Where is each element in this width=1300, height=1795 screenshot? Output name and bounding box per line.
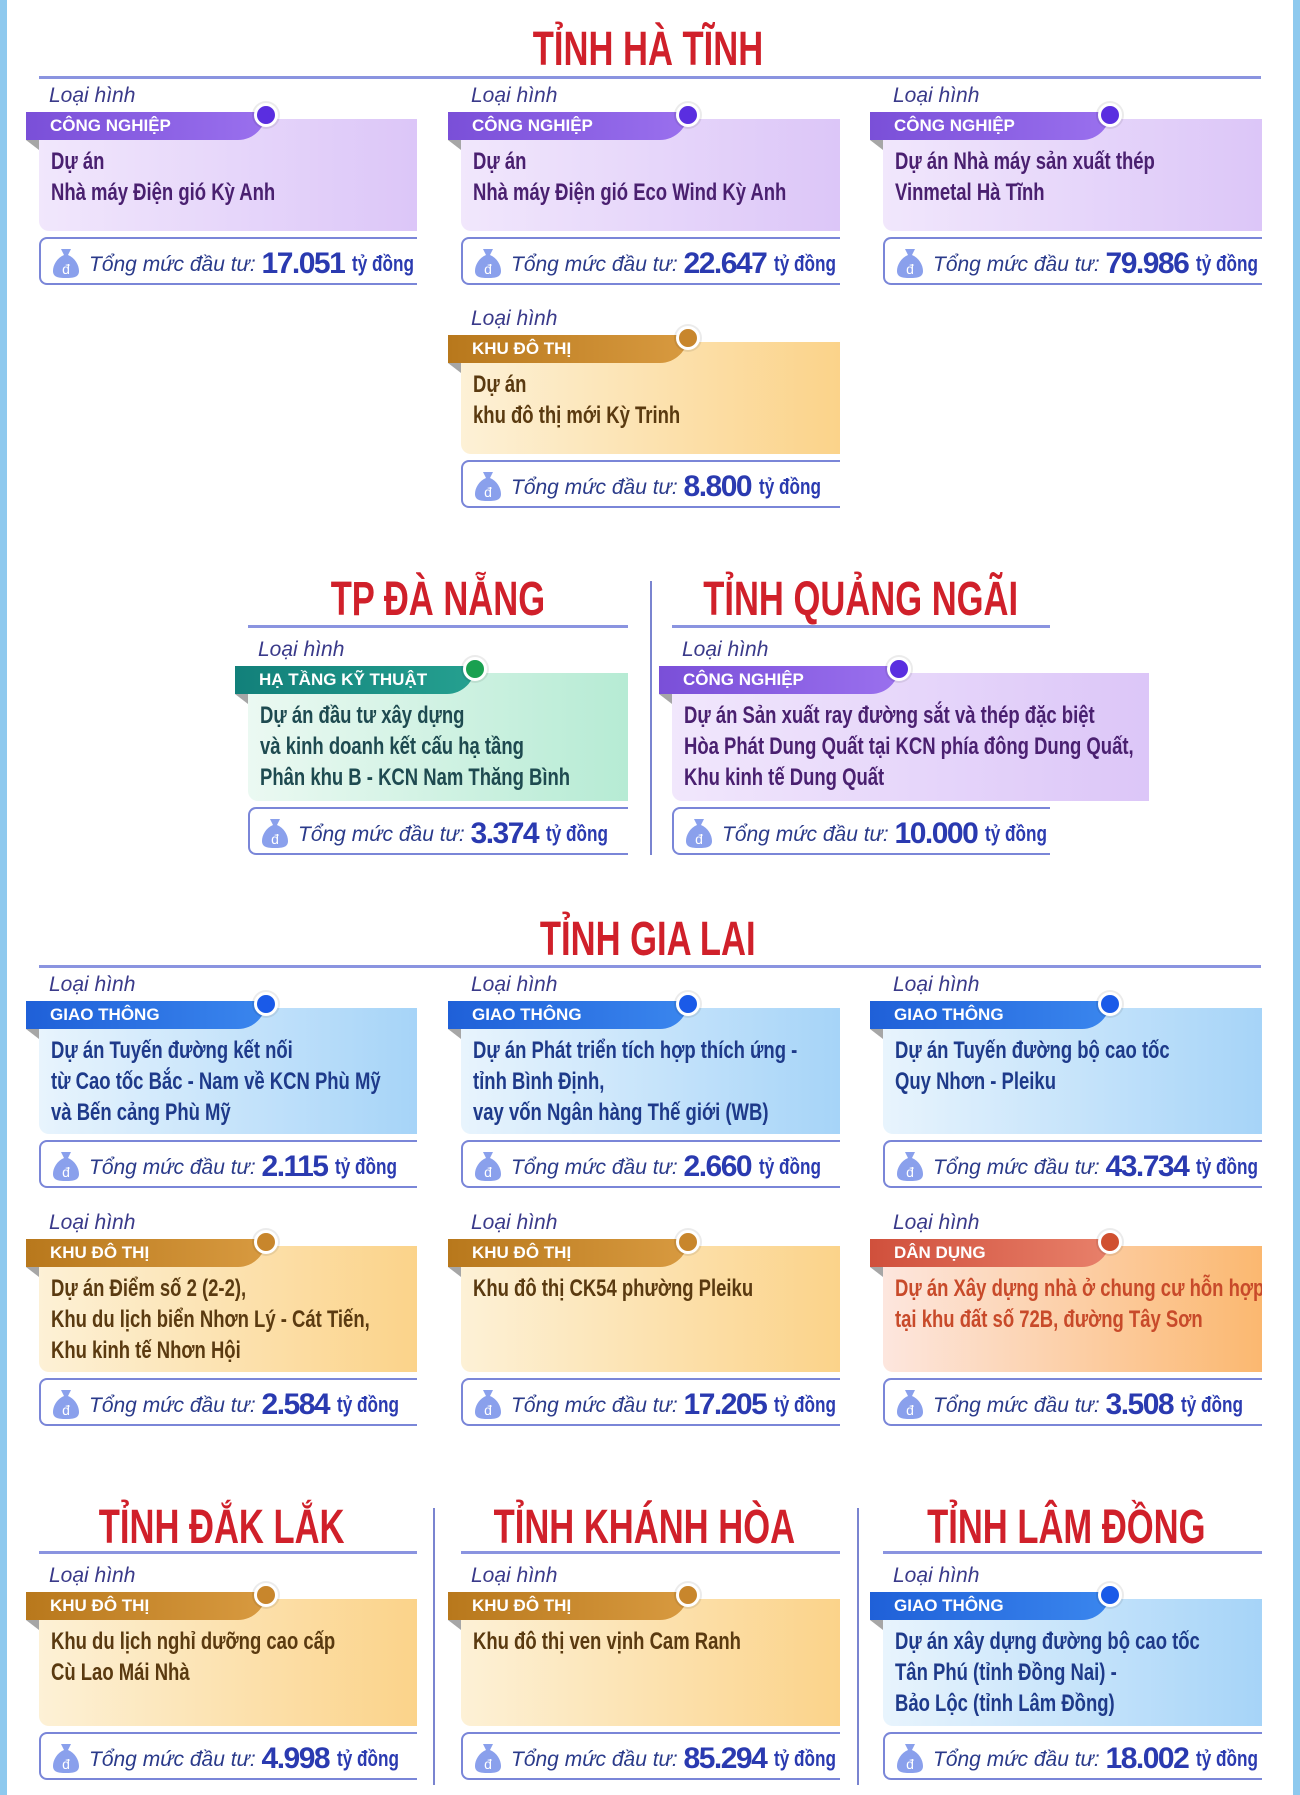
text: Tổng mức đầu tư: 3.374: [298, 817, 538, 850]
text: Loại hình: [893, 1211, 979, 1234]
card: CK54: [448, 1211, 840, 1426]
text: Nhà máy Điện gió Kỳ Anh: [51, 179, 275, 206]
text: khu đô thị mới Kỳ Trinh: [473, 402, 680, 429]
card: Eco Wind Kỳ Anh: [448, 84, 840, 285]
text: tỷ đồng: [337, 1392, 399, 1417]
tag: khu đô thị: KHU ĐÔ THỊ: [50, 1596, 149, 1615]
text: Dự án: [473, 148, 526, 175]
text: đ: [484, 261, 492, 277]
tag: dân dụng: [870, 1239, 1110, 1267]
text: Khu du lịch nghỉ dưỡng cao cấp: [51, 1628, 335, 1655]
text: tỷ đồng: [774, 1746, 836, 1771]
text: Loại hình: [682, 638, 768, 661]
tag: giao thông: GIAO THÔNG: [894, 1005, 1004, 1024]
text: Dự án Điểm số 2 (2-2),: [51, 1275, 246, 1302]
text: tại khu đất số 72B, đường Tây Sơn: [895, 1306, 1203, 1333]
card: Nam Thăng Bình: [235, 638, 628, 855]
text: Loại hình: [49, 973, 135, 996]
title: Tỉnh Gia Lai: TỈNH GIA LAI: [540, 913, 756, 966]
text: tỷ đồng: [1196, 1746, 1258, 1771]
card: Phù Mỹ: [26, 973, 417, 1188]
tag: hạ tầng kỹ thuật: HẠ TẦNG KỸ THUẬT: [259, 670, 427, 689]
text: tỷ đồng: [1181, 1392, 1243, 1417]
text: tỷ đồng: [337, 1746, 399, 1771]
text: đ: [906, 1402, 914, 1418]
text: tỷ đồng: [1196, 1154, 1258, 1179]
card: Điện gió Kỳ Anh: [26, 84, 417, 285]
card: Kỳ Trinh: [448, 307, 840, 508]
text: Loại hình: [471, 84, 557, 107]
text: đ: [484, 1164, 492, 1180]
text: tỷ đồng: [335, 1154, 397, 1179]
text: Dự án Tuyến đường kết nối: [51, 1037, 293, 1064]
title: Tỉnh Lâm Đồng: TỈNH LÂM ĐỒNG: [927, 1501, 1206, 1554]
text: Loại hình: [49, 1564, 135, 1587]
text: Tổng mức đầu tư: 18.002: [933, 1742, 1188, 1775]
card: Nhơn Lý: [26, 1211, 417, 1426]
text: Loại hình: [49, 1211, 135, 1234]
tag: khu đô thị: KHU ĐÔ THỊ: [472, 1596, 571, 1615]
text: tỷ đồng: [759, 474, 821, 499]
tag: giao thông: GIAO THÔNG: [894, 1596, 1004, 1615]
text: Loại hình: [893, 1564, 979, 1587]
text: Dự án đầu tư xây dựng: [260, 702, 464, 729]
tag: giao thông: [870, 1001, 1110, 1029]
text: đ: [906, 1756, 914, 1772]
text: Tổng mức đầu tư: 3.508: [933, 1388, 1173, 1421]
tag: công nghiệp: CÔNG NGHIỆP: [50, 116, 171, 135]
text: Dự án xây dựng đường bộ cao tốc: [895, 1628, 1200, 1655]
text: đ: [906, 261, 914, 277]
text: Tổng mức đầu tư: 8.800: [511, 470, 751, 503]
tag: khu đô thị: KHU ĐÔ THỊ: [472, 339, 571, 358]
text: tỷ đồng: [546, 821, 608, 846]
text: Tổng mức đầu tư: 22.647: [511, 247, 766, 280]
text: Loại hình: [471, 1211, 557, 1234]
text: Khu đô thị ven vịnh Cam Ranh: [473, 1628, 741, 1655]
text: Dự án Tuyến đường bộ cao tốc: [895, 1037, 1170, 1064]
text: đ: [484, 484, 492, 500]
text: Phân khu B - KCN Nam Thăng Bình: [260, 764, 570, 791]
text: Dự án Phát triển tích hợp thích ứng -: [473, 1037, 797, 1064]
tag: dân dụng: DÂN DỤNG: [894, 1243, 986, 1262]
text: Tổng mức đầu tư: 4.998: [89, 1742, 329, 1775]
text: tỷ đồng: [352, 251, 414, 276]
text: Tổng mức đầu tư: 2.115: [89, 1150, 327, 1183]
card: Quy Nhơn - Pleiku: [870, 973, 1262, 1188]
card: WB Bình Định: [448, 973, 840, 1188]
tag: khu đô thị: [26, 1592, 266, 1620]
text: Dự án: [51, 148, 104, 175]
tag: khu đô thị: KHU ĐÔ THỊ: [50, 1243, 149, 1262]
text: tỷ đồng: [774, 251, 836, 276]
text: Khu đô thị CK54 phường Pleiku: [473, 1275, 753, 1302]
title: Tỉnh Quảng Ngãi: TỈNH QUẢNG NGÃI: [704, 573, 1018, 626]
text: và kinh doanh kết cấu hạ tầng: [260, 733, 524, 760]
tag: công nghiệp: [870, 112, 1110, 140]
text: Tân Phú (tỉnh Đồng Nai) -: [895, 1659, 1117, 1686]
title: Tỉnh Hà Tĩnh: TỈNH HÀ TĨNH: [533, 23, 763, 76]
text: Tổng mức đầu tư: 10.000: [722, 817, 977, 850]
text: Loại hình: [471, 973, 557, 996]
text: đ: [695, 831, 703, 847]
text: đ: [62, 1756, 70, 1772]
text: Khu du lịch biển Nhơn Lý - Cát Tiến,: [51, 1306, 370, 1333]
text: tỉnh Bình Định,: [473, 1068, 604, 1095]
text: đ: [906, 1164, 914, 1180]
tag: công nghiệp: [448, 112, 688, 140]
text: Nhà máy Điện gió Eco Wind Kỳ Anh: [473, 179, 786, 206]
text: và Bến cảng Phù Mỹ: [51, 1099, 231, 1126]
text: Bảo Lộc (tỉnh Lâm Đồng): [895, 1690, 1115, 1717]
text: Vinmetal Hà Tĩnh: [895, 179, 1045, 206]
tag: khu đô thị: [448, 335, 688, 363]
tag: công nghiệp: CÔNG NGHIỆP: [894, 116, 1015, 135]
text: vay vốn Ngân hàng Thế giới (WB): [473, 1099, 768, 1126]
card: Hòa Phát Dung Quất: [659, 638, 1149, 855]
text: Cù Lao Mái Nhà: [51, 1659, 190, 1686]
tag: giao thông: GIAO THÔNG: [472, 1005, 582, 1024]
text: Tổng mức đầu tư: 2.660: [511, 1150, 751, 1183]
text: Tổng mức đầu tư: 79.986: [933, 247, 1188, 280]
text: Loại hình: [258, 638, 344, 661]
text: Tổng mức đầu tư: 17.205: [511, 1388, 766, 1421]
tag: giao thông: [26, 1001, 266, 1029]
text: Tổng mức đầu tư: 17.051: [89, 247, 344, 280]
text: đ: [62, 1402, 70, 1418]
text: tỷ đồng: [759, 1154, 821, 1179]
tag: công nghiệp: CÔNG NGHIỆP: [683, 670, 804, 689]
tag: khu đô thị: [448, 1592, 688, 1620]
text: đ: [62, 1164, 70, 1180]
text: Khu kinh tế Dung Quất: [684, 764, 884, 791]
title: TP Đà Nẵng: TP ĐÀ NẴNG: [331, 573, 545, 626]
text: tỷ đồng: [985, 821, 1047, 846]
text: Dự án Nhà máy sản xuất thép: [895, 148, 1155, 175]
text: Khu kinh tế Nhơn Hội: [51, 1337, 241, 1364]
text: Tổng mức đầu tư: 2.584: [89, 1388, 329, 1421]
tag: giao thông: [448, 1001, 688, 1029]
text: tỷ đồng: [774, 1392, 836, 1417]
tag: khu đô thị: KHU ĐÔ THỊ: [472, 1243, 571, 1262]
card: Vinmetal: [870, 84, 1262, 285]
tag: công nghiệp: [659, 666, 899, 694]
tag: công nghiệp: [26, 112, 266, 140]
title: Tỉnh Đắk Lắk: TỈNH ĐẮK LẮK: [99, 1501, 345, 1554]
text: Loại hình: [49, 84, 135, 107]
text: đ: [62, 261, 70, 277]
text: đ: [484, 1402, 492, 1418]
card: Tân Phú - Bảo Lộc: [870, 1564, 1262, 1780]
title: Tỉnh Khánh Hòa: TỈNH KHÁNH HÒA: [494, 1501, 795, 1554]
text: Dự án Xây dựng nhà ở chung cư hỗn hợp: [895, 1275, 1262, 1302]
text: Loại hình: [471, 307, 557, 330]
tag: giao thông: GIAO THÔNG: [50, 1005, 160, 1024]
text: từ Cao tốc Bắc - Nam về KCN Phù Mỹ: [51, 1068, 381, 1095]
text: Loại hình: [893, 84, 979, 107]
card: Cù Lao Mái Nhà: [26, 1564, 417, 1780]
text: Tổng mức đầu tư: 43.734: [933, 1150, 1188, 1183]
tag: khu đô thị: [448, 1239, 688, 1267]
text: Loại hình: [471, 1564, 557, 1587]
tag: công nghiệp: CÔNG NGHIỆP: [472, 116, 593, 135]
tag: hạ tầng kỹ thuật: [235, 666, 475, 694]
text: Dự án Sản xuất ray đường sắt và thép đặc biệt: [684, 702, 1095, 729]
tag: khu đô thị: [26, 1239, 266, 1267]
card: Cam Ranh: [448, 1564, 840, 1780]
tag: giao thông: [870, 1592, 1110, 1620]
text: Quy Nhơn - Pleiku: [895, 1068, 1056, 1095]
text: đ: [484, 1756, 492, 1772]
text: Dự án: [473, 371, 526, 398]
text: đ: [271, 831, 279, 847]
text: Loại hình: [893, 973, 979, 996]
text: Tổng mức đầu tư: 85.294: [511, 1742, 766, 1775]
text: Hòa Phát Dung Quất tại KCN phía đông Dung Quất,: [684, 733, 1134, 760]
card: 72B Tây Sơn: [870, 1211, 1262, 1426]
text: tỷ đồng: [1196, 251, 1258, 276]
